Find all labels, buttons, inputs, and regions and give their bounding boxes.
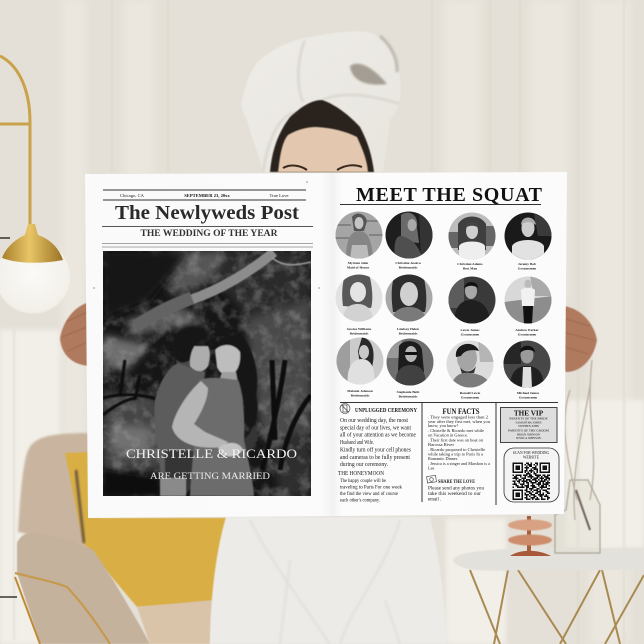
portrait captions: Lindsay Helen [397, 327, 419, 331]
the VIP box: BRIAN JOHNSON [517, 432, 541, 436]
fun facts section: while taking a trip to Paris In a [428, 452, 483, 456]
headline [102, 226, 313, 247]
portrait: Maid of Honor [335, 211, 383, 259]
honeymoon section: The happy couple will be [340, 479, 387, 484]
honeymoon section: the find the view and of course [340, 492, 399, 497]
the VIP box: SAMANTHA JOHNS [516, 420, 542, 424]
the VIP box: PARENTS OF THE BRIDE [509, 416, 548, 420]
share the love section: SHARE THE LOVE [438, 479, 475, 485]
unplugged ceremony section [340, 404, 417, 468]
portrait captions: Myriam John [348, 261, 368, 265]
announcement line: ARE GETTING MARRIED [150, 472, 270, 482]
honeymoon section: traveling to Paris For one week [340, 486, 402, 490]
honeymoon section [338, 470, 402, 504]
headline: THE WEDDING OF THE YEAR [140, 228, 279, 239]
the VIP box: JESSICA JOHNSON [516, 436, 542, 440]
portrait captions: Groomsmen [519, 396, 537, 400]
portrait: Groomsman 2 [448, 276, 496, 324]
heading: MEET THE SQUAT [356, 184, 543, 206]
portrait captions: Andrew Parker [515, 328, 539, 332]
fun facts section: . Ricardo proposed to Christelle [428, 447, 485, 452]
masthead strip [103, 190, 306, 200]
unplugged ceremony section: and cameras to be fully present [340, 454, 410, 461]
portrait captions: Christine Jessica [395, 261, 421, 265]
QR code card: SCAN FOR WEDDING [513, 451, 550, 455]
share the love section: take this weekend to our [428, 492, 481, 497]
fun facts section: on Vacation in Greece. [428, 432, 468, 438]
portrait captions: Bridesmaids [399, 266, 418, 270]
honeymoon section: each other's company. [340, 498, 380, 504]
honeymoon section: THE HONEYMOON [338, 470, 384, 477]
fun facts section: . Chistelle & Ricardo met while [428, 428, 484, 433]
armchair and cushion [15, 433, 228, 644]
ornament dots [93, 181, 320, 289]
the VIP box: THE VIP [514, 410, 544, 418]
portrait captions: Jessica Williams [347, 327, 372, 331]
side table with decor [453, 360, 644, 644]
unplugged ceremony section: during our ceremony. [340, 461, 388, 468]
portrait captions: Groomsmen [518, 266, 536, 270]
portrait: Bridesmaid 4 [336, 337, 384, 385]
woman: bathrobe [210, 517, 446, 644]
woman: towel turban [242, 31, 401, 172]
fun facts section: . Jessica is a singer and Marshon is a [428, 461, 490, 466]
portrait: Best Man [448, 212, 496, 260]
column rules [340, 402, 558, 505]
share the love section: email . [428, 498, 441, 502]
couple photo [103, 251, 311, 496]
share the love section [427, 475, 485, 502]
fun facts section: Lee [428, 466, 435, 470]
portrait captions: Groomsmen [518, 332, 536, 336]
portrait: Bridesmaid 1 [385, 211, 433, 259]
fun facts section: FUN FACTS [442, 407, 480, 416]
portrait captions: Bridesmaids [399, 394, 418, 398]
portrait: Groomsman 1 [504, 212, 552, 260]
unplugged ceremony section: Husband and Wife. [340, 439, 374, 446]
hand: right [552, 306, 597, 372]
portrait: Groomsman 5 [503, 340, 551, 388]
portrait captions: Bridesmaids [351, 394, 370, 398]
share the love section: Please send any photos you [428, 486, 485, 492]
portrait captions: Stephanie Beth [397, 390, 419, 394]
the VIP box: PARENTS OF THE GROOM [508, 428, 549, 432]
masthead strip: SEPTEMBER 23, 20xx [184, 193, 230, 198]
unplugged ceremony section: special day of our lives, we want [340, 424, 411, 432]
portrait captions: Best Man [463, 266, 477, 270]
floor lamp [0, 56, 70, 597]
QR code [512, 462, 550, 500]
hand: left [60, 301, 104, 366]
fun facts section: year after they first met, when you [428, 419, 491, 425]
portrait captions: Groomsmen [461, 396, 479, 400]
portrait: Groomsman 3 [504, 276, 552, 324]
portrait captions: Christian Adams [457, 262, 483, 266]
portrait captions: Bridesmaids [399, 332, 418, 336]
the VIP box [500, 408, 557, 442]
portrait captions: Jeremy Bob [518, 262, 536, 266]
fun facts section: . Their first date was on boat on [428, 438, 484, 442]
masthead strip: True Love [269, 193, 289, 198]
newspaper: left page [85, 173, 334, 518]
unplugged ceremony section: all of your attention as we become [340, 432, 416, 438]
icon: camera [427, 475, 436, 483]
newspaper name: The Newlyweds Post [115, 202, 299, 224]
portrait captions: Melanie Johnson [347, 389, 373, 393]
QR code card [504, 448, 559, 502]
fun facts section: know, you know! [428, 423, 458, 429]
fun facts section: Romantic Dinner. [428, 456, 458, 461]
portrait captions: Bridesmaids [350, 332, 369, 336]
portrait captions: Groomsmen [461, 332, 479, 336]
newspaper: right page [93, 172, 567, 516]
masthead strip: Chicago, CA [120, 193, 145, 199]
fun facts section: . They were engaged less than 2 [428, 414, 488, 420]
portrait captions [347, 261, 540, 400]
unplugged ceremony section: Kindly turn off your cell phones [340, 446, 412, 454]
unplugged ceremony section: UNPLUGGED CEREMONY [355, 407, 417, 414]
fun facts section: Barossa River [428, 442, 455, 447]
the VIP box: STEPHEN JOHN [518, 424, 540, 428]
portrait: Bridesmaid 2 [335, 274, 383, 322]
portrait captions: Lewis James [461, 328, 480, 332]
portrait: Bridesmaid 5 [386, 338, 434, 386]
icon: no phone [340, 404, 350, 414]
portrait captions: Ronald Lewis [460, 391, 481, 395]
QR code card: WEBSITE [523, 456, 540, 460]
portrait: Bridesmaid 3 [385, 274, 433, 322]
fun facts section [428, 407, 491, 470]
unplugged ceremony section: On our wedding day, the most [340, 417, 408, 424]
portrait captions: Maid of Honor [347, 266, 370, 270]
portrait: Groomsman 4 [446, 340, 494, 388]
portrait captions: Michael James [517, 391, 540, 395]
couple names: CHRISTELLE & RICARDO [126, 446, 297, 461]
